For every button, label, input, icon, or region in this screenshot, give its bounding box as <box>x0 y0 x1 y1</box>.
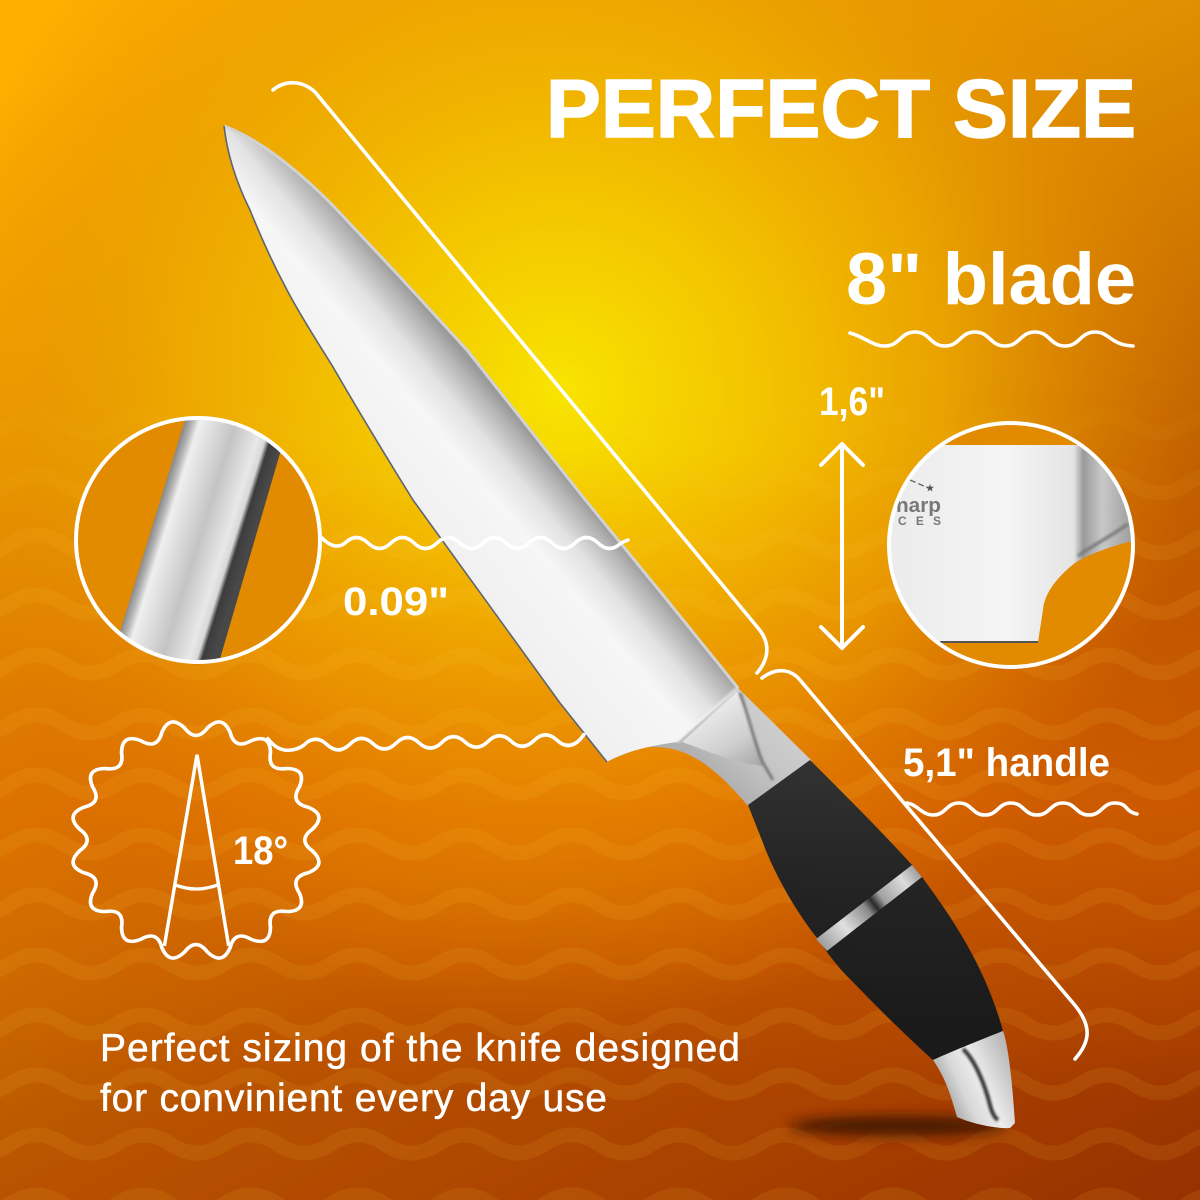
blade cutting edge <box>224 126 607 762</box>
angle value: 18° <box>233 829 288 873</box>
bolster bevel highlight <box>682 692 763 766</box>
handle label wavy underline <box>907 803 1137 815</box>
knife bolster <box>610 686 812 806</box>
blade length label: 8" blade <box>846 239 1136 320</box>
zoom circle: blade height: ★ <box>926 483 935 493</box>
caption: for convinient every day use <box>100 1077 607 1120</box>
angle wave connector <box>268 733 584 751</box>
handle length label: 5,1" handle <box>903 741 1110 785</box>
knife handle <box>748 760 1003 1060</box>
handle dimension bracket <box>762 671 1087 1059</box>
knife pommel <box>933 1031 1015 1128</box>
blade height label: 1,6" <box>819 380 885 424</box>
zoom circle: blade thickness <box>74 416 322 664</box>
knife shadow <box>790 1116 1006 1136</box>
handle metal band <box>816 865 922 951</box>
zoom circle: blade height <box>880 423 1140 667</box>
bolster crease <box>740 693 773 780</box>
bolster seam <box>677 688 737 742</box>
thickness wave connector <box>322 538 628 548</box>
blade spine highlight <box>224 126 738 688</box>
caption: Perfect sizing of the knife designed <box>100 1027 740 1070</box>
blade height arrow <box>821 444 863 648</box>
angle diagram <box>164 755 229 946</box>
caption <box>100 1027 740 1120</box>
blade dimension bracket <box>273 83 767 673</box>
pommel crease <box>963 1049 998 1120</box>
thickness label: 0.09" <box>343 580 449 624</box>
title: PERFECT SIZE <box>546 62 1136 155</box>
edge angle scalloped badge <box>73 722 319 958</box>
knife blade <box>224 126 738 762</box>
zoom circle: blade height: C E S <box>898 514 941 528</box>
knife <box>224 126 1015 1128</box>
blade label wavy underline <box>850 332 1133 346</box>
zoom circle: blade height: narp <box>896 495 941 517</box>
